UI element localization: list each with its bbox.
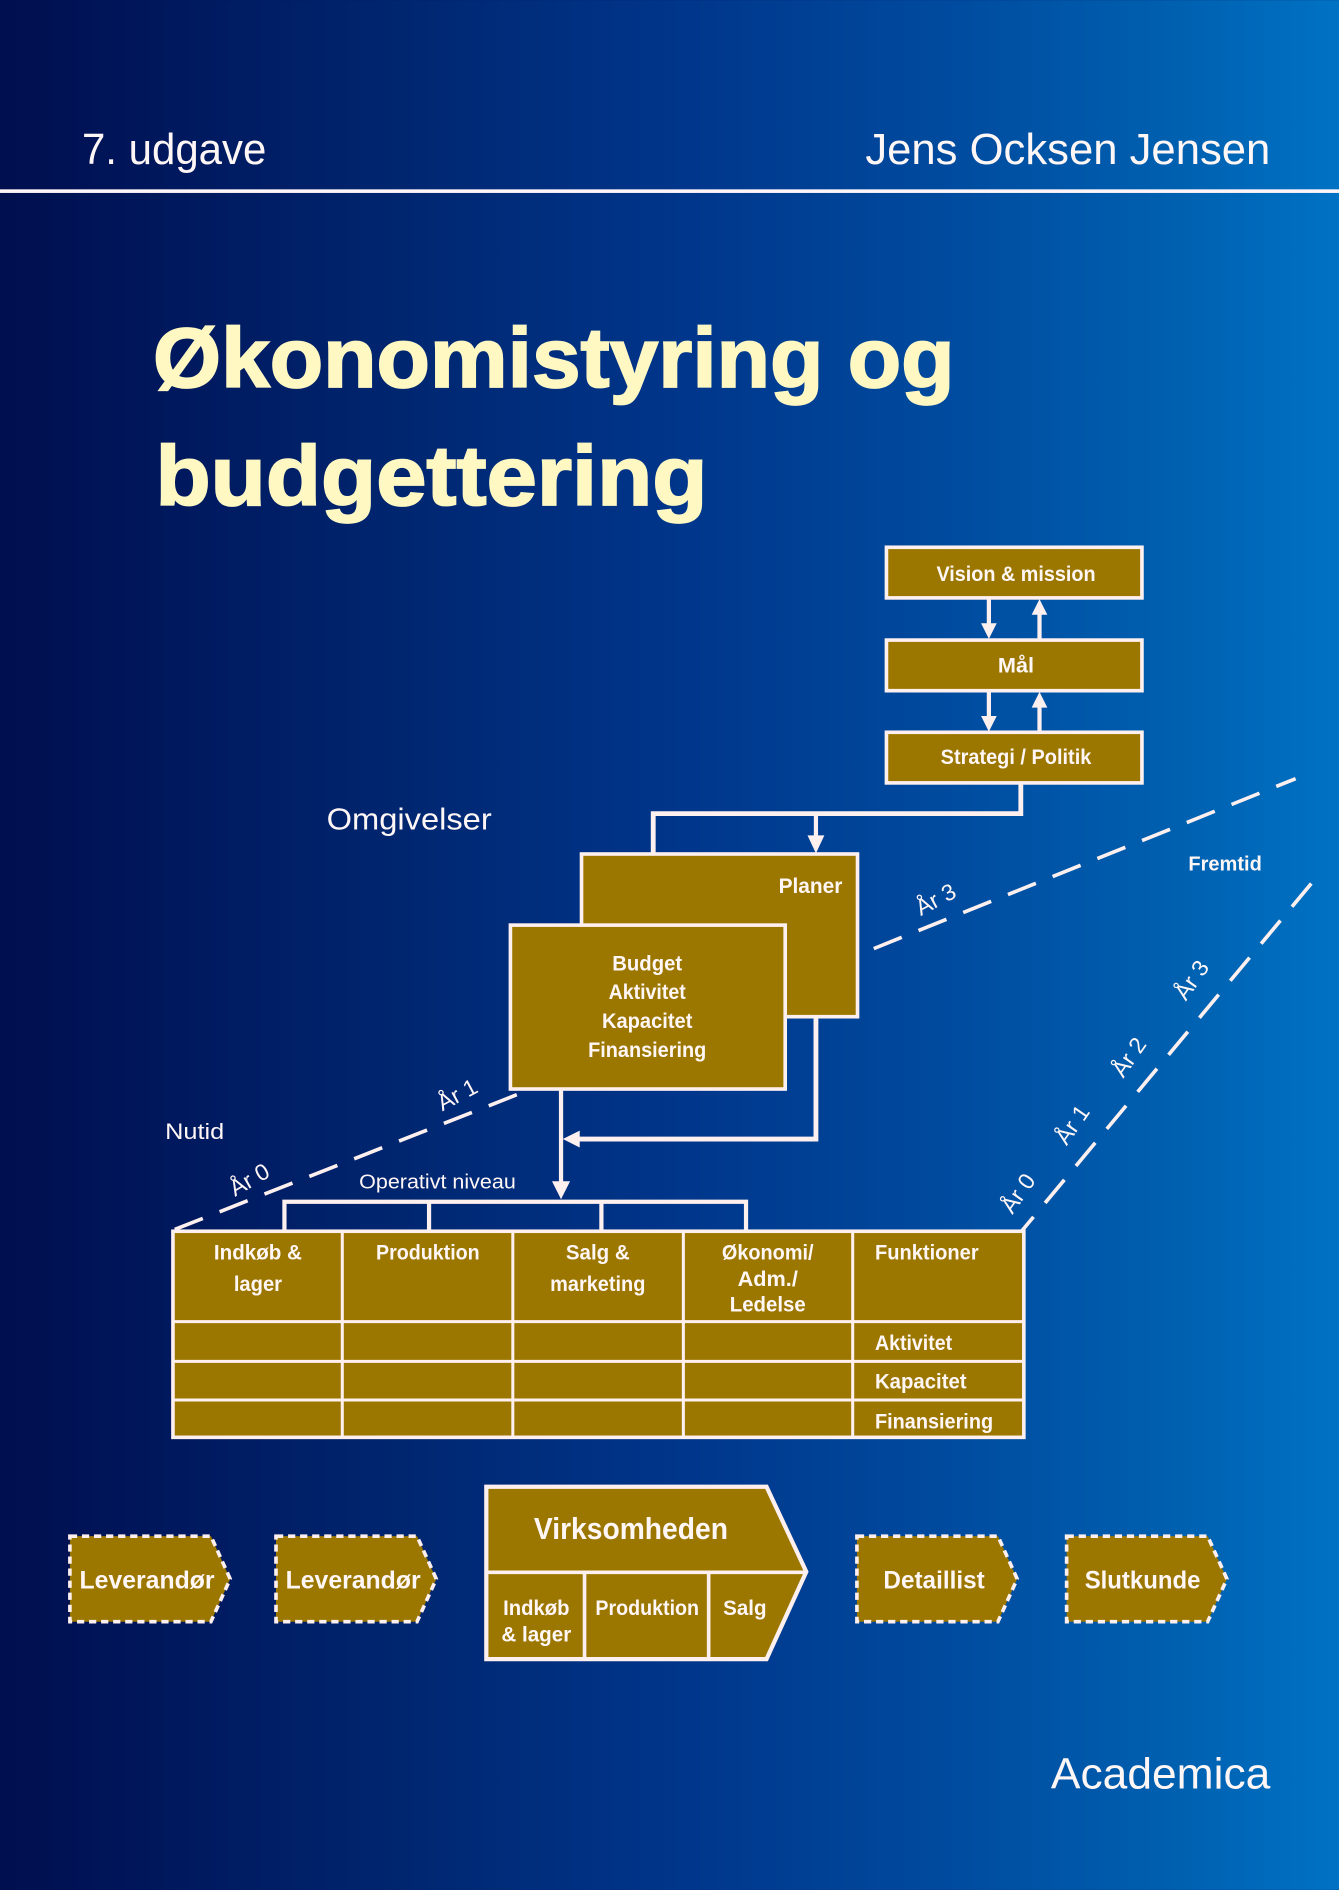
column: functions: Finansiering: [875, 1408, 993, 1433]
year labels present line: År 0: [225, 1158, 274, 1201]
box: strategy and policy: [886, 732, 1142, 783]
chevron: supplier 1: Leverandør: [80, 1567, 215, 1595]
publisher: Academica: [1051, 1751, 1271, 1799]
year labels right line: [995, 955, 1214, 1218]
panel: budget: Aktivitet: [609, 979, 686, 1004]
column: finance and management: Adm./: [738, 1266, 798, 1291]
chevron: supplier 2: [276, 1536, 436, 1622]
connector: budget to operational level: [552, 1090, 570, 1199]
box: goals: Mål: [998, 653, 1034, 678]
functions table: [172, 1231, 1024, 1438]
year labels present line: [225, 1073, 482, 1201]
year labels right line: År 0: [995, 1169, 1041, 1218]
present label: Nutid: [165, 1119, 224, 1144]
column: finance and management: Ledelse: [730, 1291, 806, 1316]
connector: strategy to plans: [653, 784, 1021, 853]
chevron: supplier 1: [70, 1536, 230, 1622]
panel: budget: Kapacitet: [602, 1008, 692, 1033]
column: sales and marketing: marketing: [550, 1271, 645, 1296]
chevron: retailer: Detaillist: [883, 1567, 985, 1595]
company stage: sales: Salg: [723, 1595, 767, 1620]
company stage: purchasing: [501, 1595, 572, 1647]
column: finance and management: Økonomi/: [722, 1240, 814, 1265]
company heading: Virksomheden: [534, 1513, 728, 1546]
author name: Jens Ocksen Jensen: [865, 126, 1270, 174]
chevron: retailer: [857, 1536, 1017, 1622]
column: functions: Kapacitet: [875, 1369, 967, 1394]
arrows: goals to strategy: [981, 692, 1047, 732]
title: budgettering: [155, 429, 707, 523]
company stage: production: Produktion: [595, 1595, 699, 1620]
panel: budget: Budget: [612, 950, 682, 975]
year label upper line: År 3: [911, 878, 960, 920]
environment label: Omgivelser: [327, 803, 492, 836]
chevron: end customer: Slutkunde: [1085, 1567, 1200, 1595]
future boundary line right: [1022, 884, 1311, 1231]
company stage: purchasing: Indkøb: [503, 1595, 569, 1620]
box: vision and mission: [886, 547, 1142, 598]
arrows: vision to goals: [981, 599, 1047, 639]
header rule: [0, 189, 1339, 193]
year labels right line: År 3: [1169, 955, 1214, 1005]
title: Økonomistyring og: [153, 311, 955, 405]
chevron: supplier 2: Leverandør: [286, 1567, 421, 1595]
box: vision and mission: Vision & mission: [936, 561, 1096, 586]
box: goals: [886, 640, 1142, 691]
column: functions: Funktioner: [875, 1240, 979, 1265]
chevron: the company: [486, 1487, 806, 1659]
edition label: 7. udgave: [82, 126, 266, 174]
present boundary line: [175, 1091, 527, 1229]
column: functions: Aktivitet: [875, 1330, 952, 1355]
panel: plans: [582, 854, 858, 1017]
company stage: purchasing: & lager: [501, 1622, 572, 1647]
column: finance and management: [722, 1240, 814, 1316]
panel: plans: Planer: [779, 873, 843, 898]
column: functions: [875, 1240, 993, 1433]
connector: operational branch lines: [284, 1202, 746, 1231]
column: purchasing and stock: lager: [234, 1271, 283, 1296]
column: purchasing and stock: [214, 1240, 302, 1296]
column: production: Produktion: [376, 1240, 480, 1265]
column: sales and marketing: Salg &: [566, 1240, 630, 1265]
year labels right line: År 1: [1049, 1100, 1095, 1149]
year labels present line: År 1: [432, 1073, 482, 1116]
future label: Fremtid: [1188, 853, 1262, 875]
column: purchasing and stock: Indkøb &: [214, 1240, 302, 1265]
future boundary line: [874, 779, 1296, 949]
operational level label: Operativt niveau: [359, 1171, 516, 1193]
title: [153, 311, 955, 523]
chevron: end customer: [1067, 1536, 1227, 1622]
panel: budget: Finansiering: [588, 1037, 706, 1062]
connector: plans return to budget line: [563, 1017, 816, 1147]
panel: budget: [510, 925, 785, 1089]
box: strategy and policy: Strategi / Politik: [941, 744, 1092, 769]
column: sales and marketing: [550, 1240, 645, 1296]
year labels right line: År 2: [1106, 1032, 1151, 1082]
